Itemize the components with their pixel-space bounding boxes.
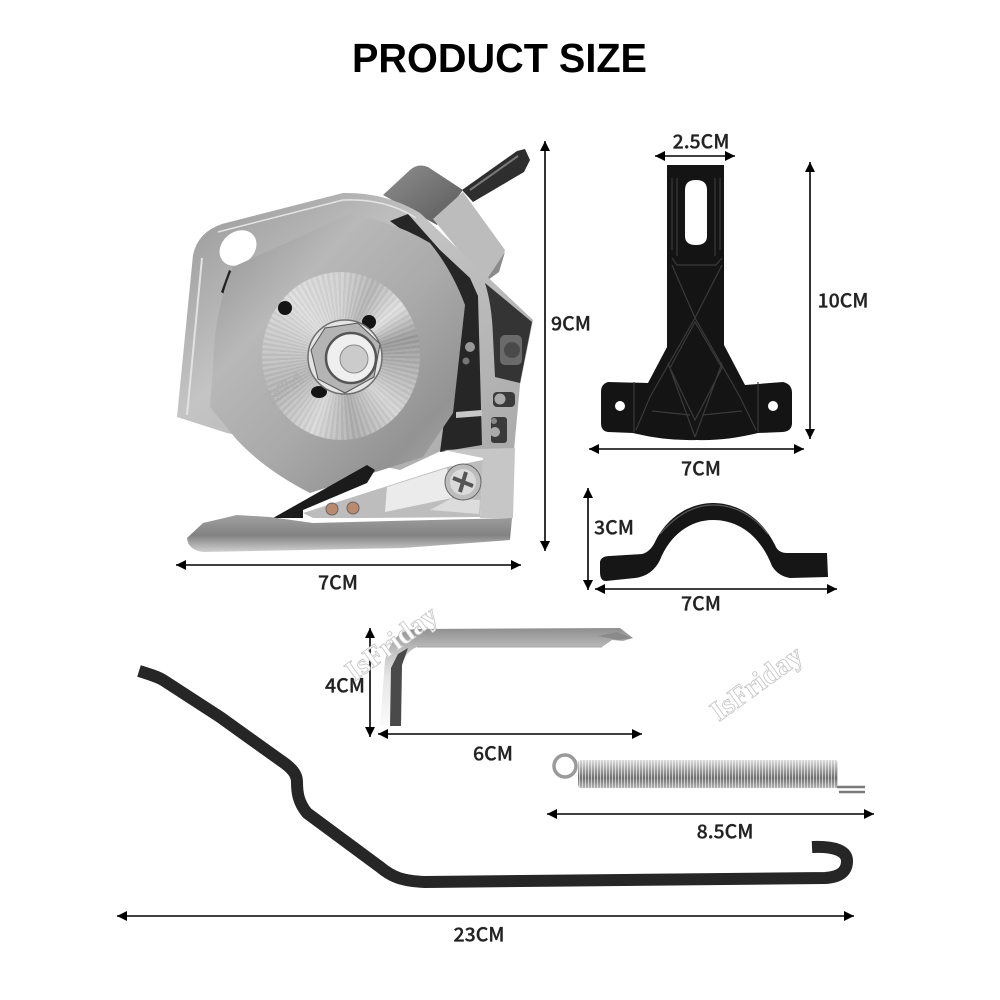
centre nut	[308, 320, 382, 394]
casting frame	[177, 193, 533, 470]
watermark on hub: IsFri	[263, 368, 307, 409]
blade shadow	[221, 270, 233, 294]
allen key	[380, 628, 633, 726]
long steel rod	[139, 671, 847, 882]
dimension: clamp width: 7CM	[681, 588, 721, 616]
hex drive bit	[462, 149, 530, 202]
copper rivets	[326, 502, 359, 515]
dimension: key width: 6CM	[473, 738, 513, 766]
frame hole	[212, 223, 264, 273]
saddle clamp	[600, 503, 828, 581]
collar	[383, 166, 505, 282]
foot plate	[187, 515, 512, 552]
dimension: bracket slot width	[655, 126, 735, 156]
spring	[554, 755, 865, 792]
left frame edge	[187, 258, 202, 415]
guard bracket	[303, 448, 515, 518]
T bracket	[601, 165, 792, 440]
watermark: IsFriday	[704, 639, 810, 728]
title: PRODUCT SIZE	[352, 35, 647, 81]
dark interior	[390, 214, 482, 452]
cutter head product photo	[177, 149, 533, 552]
dimension: bracket slot width: 2.5CM	[673, 126, 729, 154]
blade holes	[278, 301, 376, 398]
dimension: key height: 4CM	[325, 670, 365, 698]
small strut	[456, 410, 482, 418]
upper pocket	[485, 283, 532, 383]
dimension: clamp height	[588, 488, 634, 590]
black lower wedge	[273, 465, 375, 518]
dimension: clamp height: 3CM	[594, 512, 634, 540]
dimension: spring length: 8.5CM	[697, 816, 753, 844]
top frame band edge	[218, 200, 416, 232]
dimension: bracket width: 7CM	[681, 452, 721, 482]
dimension: bracket height: 10CM	[817, 284, 869, 314]
dimension: key height	[325, 628, 370, 737]
screw	[445, 464, 481, 500]
dimension: cutter width: 7CM	[318, 566, 358, 596]
dimension: cutter height: 9CM	[551, 308, 591, 336]
blade hub disc	[262, 272, 420, 440]
bearing pockets	[462, 342, 515, 443]
dimension: rod length: 23CM	[453, 918, 505, 948]
hexagonal blade	[210, 214, 465, 493]
watermark on key: IsFriday	[339, 599, 445, 688]
